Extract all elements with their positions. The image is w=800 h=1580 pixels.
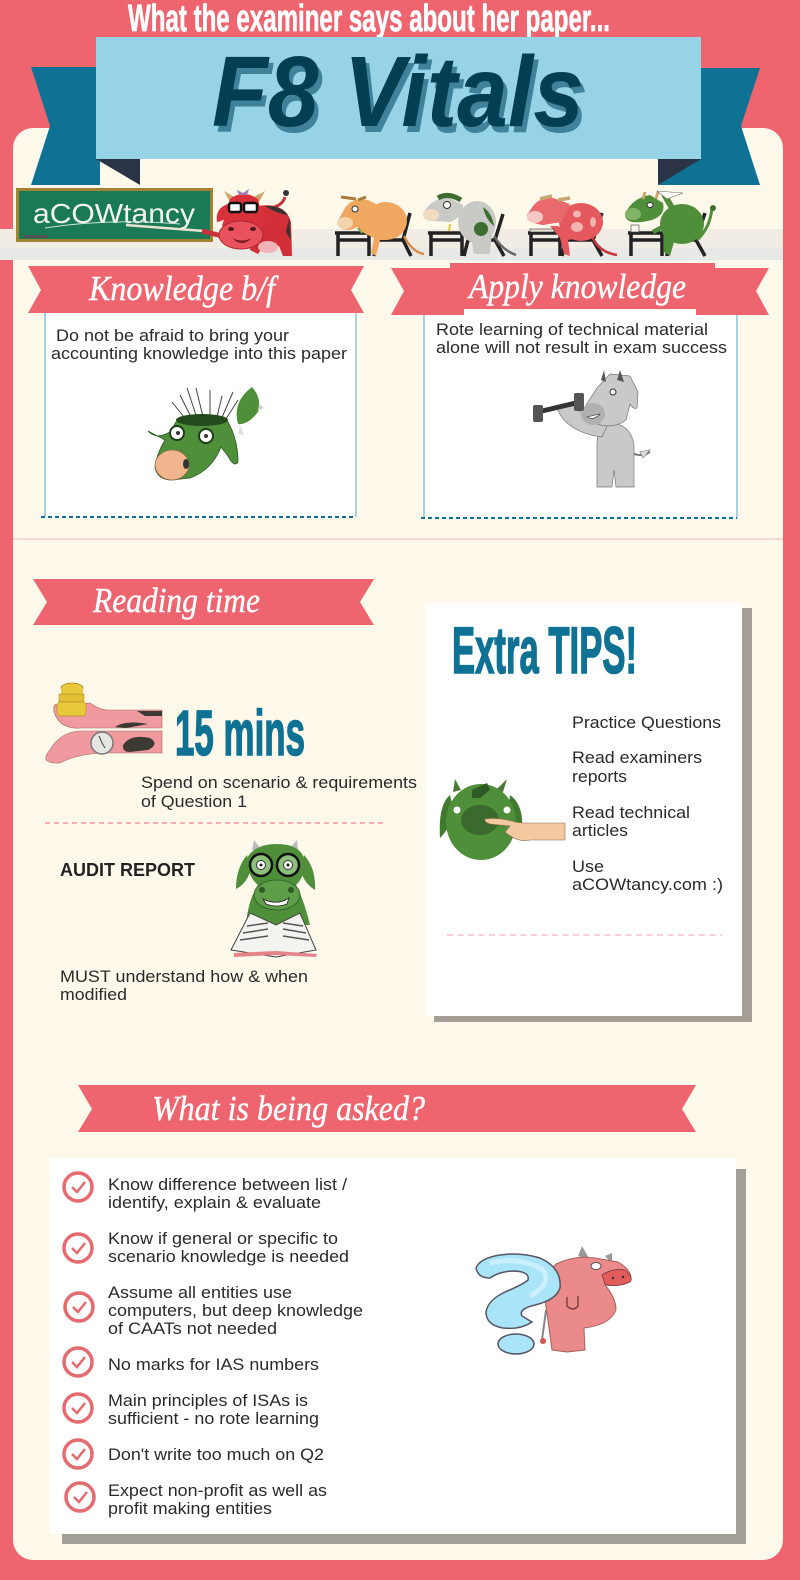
heading: Reading time [92, 581, 260, 620]
checklist text: Don't write too much on Q2 [108, 1445, 324, 1464]
icon: green cow with finger in nose [440, 779, 565, 860]
icon: teacher cow [126, 189, 292, 256]
icon: orange student cow [335, 197, 424, 256]
heading ribbon [78, 1085, 696, 1132]
heading: Extra TIPS! [452, 613, 637, 687]
checklist text: profit making entities [108, 1499, 272, 1518]
text block: Rote learning of technical material [436, 320, 708, 339]
icon: grey cow with dumbbell [533, 370, 650, 487]
checklist icons [64, 1173, 94, 1511]
card [424, 310, 737, 518]
ribbon fold left [96, 159, 140, 185]
checklist text: identify, explain & evaluate [108, 1193, 321, 1212]
text block: modified [60, 985, 127, 1004]
chalkboard logo [16, 188, 213, 242]
panel: reading time [33, 579, 417, 1004]
tips list: Read technical [572, 803, 690, 822]
text block [141, 773, 417, 811]
title ribbon [31, 36, 760, 185]
checklist text: Know difference between list / [108, 1175, 347, 1194]
card shadow [62, 1169, 746, 1544]
heading: Knowledge b/f [88, 269, 279, 308]
text block [436, 320, 727, 357]
tips list: Practice Questions [572, 713, 721, 732]
checklist text: Main principles of ISAs is [108, 1391, 308, 1410]
card [425, 603, 742, 1016]
icon: cow reading book [231, 840, 317, 957]
checklist text: Expect non-profit as well as [108, 1481, 327, 1500]
heading ribbon [28, 266, 364, 313]
icon: grey student cow [423, 195, 516, 256]
checklist text: Know if general or specific to [108, 1229, 338, 1248]
title: F8 Vitals [216, 42, 588, 154]
title panel [96, 37, 701, 159]
chalkboard logo: aCOWtancy [33, 198, 195, 229]
heading: audit report: AUDIT REPORT [60, 860, 195, 880]
text block: accounting knowledge into this paper [51, 344, 347, 363]
checklist text [108, 1175, 363, 1518]
text block [60, 967, 308, 1004]
card [50, 1158, 736, 1534]
checklist text: computers, but deep knowledge [108, 1301, 363, 1320]
icon: green student cow [625, 191, 716, 256]
text block: alone will not result in exam success [436, 338, 727, 357]
checklist text: No marks for IAS numbers [108, 1355, 319, 1374]
checklist text: of CAATs not needed [108, 1319, 277, 1338]
ribbon tail right [658, 68, 760, 185]
tips list: aCOWtancy.com :) [572, 875, 723, 894]
heading: Apply knowledge [467, 267, 686, 306]
tips list: Use [572, 857, 604, 876]
text block: Do not be afraid to bring your [56, 326, 289, 345]
text block: of Question 1 [141, 792, 247, 811]
card [45, 310, 356, 517]
panel: apply knowledge [391, 263, 769, 518]
heading ribbon [33, 579, 374, 625]
text block: MUST understand how & when [60, 967, 308, 986]
heading ribbon [391, 263, 769, 315]
tips list: reports [572, 767, 627, 786]
text block [51, 326, 347, 363]
panel: what is being asked [50, 1085, 746, 1544]
stat: 15 mins: 15 mins [175, 697, 305, 769]
card shadow [434, 608, 752, 1022]
text block: Spend on scenario & requirements [141, 773, 417, 792]
heading: What is being asked? [152, 1089, 425, 1128]
icon: question mark with cow [476, 1246, 631, 1354]
panel: extra tips [425, 603, 752, 1022]
classroom floor [0, 229, 783, 260]
checklist text: Assume all entities use [108, 1283, 292, 1302]
tips list: Read examiners [572, 748, 702, 767]
icon: red student cow [527, 196, 617, 256]
title: F8 Vitals [212, 36, 584, 148]
ribbon fold right [658, 159, 701, 185]
icon: hoof with coins and watch [46, 683, 162, 763]
tips list: articles [572, 821, 628, 840]
panel: knowledge b/f [28, 266, 364, 517]
tips list [572, 713, 723, 894]
ribbon tail left [31, 67, 140, 185]
checklist text: sufficient - no rote learning [108, 1409, 319, 1428]
icon: green cow head with pins [148, 387, 264, 480]
checklist text: scenario knowledge is needed [108, 1247, 349, 1266]
